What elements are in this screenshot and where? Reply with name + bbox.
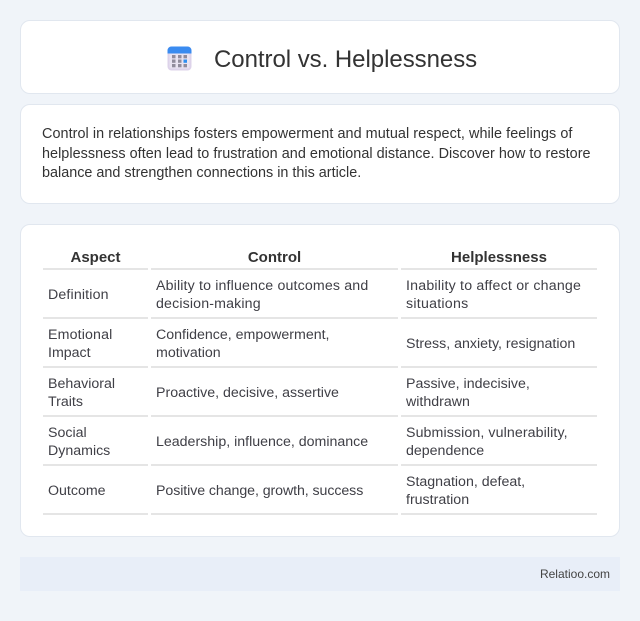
row: Social Dynamics — [48, 425, 568, 459]
row: Emotional Impact: Confidence, empowerment, — [156, 327, 330, 343]
footer — [20, 557, 620, 591]
panel: title card — [20, 20, 620, 94]
row: Social Dynamics: dependence — [406, 443, 484, 459]
row: Behavioral Traits: Passive, indecisive, — [406, 376, 530, 392]
intro text: balance and strengthen connections in this article. — [42, 165, 361, 181]
row: Outcome: Positive change, growth, success — [156, 483, 363, 499]
row: Definition: Ability to influence outcomes and — [156, 278, 368, 294]
row: Definition: Definition — [48, 287, 109, 303]
row: Emotional Impact: Emotional — [48, 327, 112, 343]
comparison table — [43, 249, 597, 515]
panel: introduction — [20, 104, 620, 204]
header: Control: Control — [248, 249, 301, 266]
icon: calendar — [168, 46, 192, 70]
row: Social Dynamics: Leadership, influence, dominance — [156, 434, 368, 450]
row: Social Dynamics: Dynamics — [48, 443, 110, 459]
row: Outcome — [48, 474, 525, 508]
row: Definition — [48, 278, 581, 312]
intro text — [42, 126, 591, 181]
row: Social Dynamics: Social — [48, 425, 87, 441]
row: Behavioral Traits: withdrawn — [406, 394, 470, 410]
intro text: helplessness often lead to frustration and emotional distance. Discover how to restore — [42, 146, 591, 162]
row: Definition: Inability to affect or change — [406, 278, 581, 294]
row: Behavioral Traits: Behavioral — [48, 376, 115, 392]
row: Emotional Impact: motivation — [156, 345, 221, 361]
row: Emotional Impact — [48, 327, 575, 361]
header: Helplessness: Helplessness — [451, 249, 547, 266]
intro text: Control in relationships fosters empowerment and mutual respect, while feelings of — [42, 126, 572, 142]
row: Outcome: Stagnation, defeat, — [406, 474, 525, 490]
row: Behavioral Traits — [48, 376, 530, 410]
row: Outcome: Outcome — [48, 483, 106, 499]
footer credit: Relatioo.com — [540, 567, 610, 581]
row: Emotional Impact: Stress, anxiety, resignation — [406, 336, 575, 352]
title: Control vs. Helplessness — [214, 46, 477, 73]
row: Definition: decision-making — [156, 296, 261, 312]
row: Behavioral Traits: Traits — [48, 394, 83, 410]
row: Outcome: frustration — [406, 492, 469, 508]
row: Social Dynamics: Submission, vulnerability, — [406, 425, 568, 441]
row: Emotional Impact: Impact — [48, 345, 91, 361]
header: Aspect: Aspect — [70, 249, 121, 266]
row: Definition: situations — [406, 296, 468, 312]
panel: comparison table — [20, 224, 620, 537]
row: Behavioral Traits: Proactive, decisive, assertive — [156, 385, 339, 401]
